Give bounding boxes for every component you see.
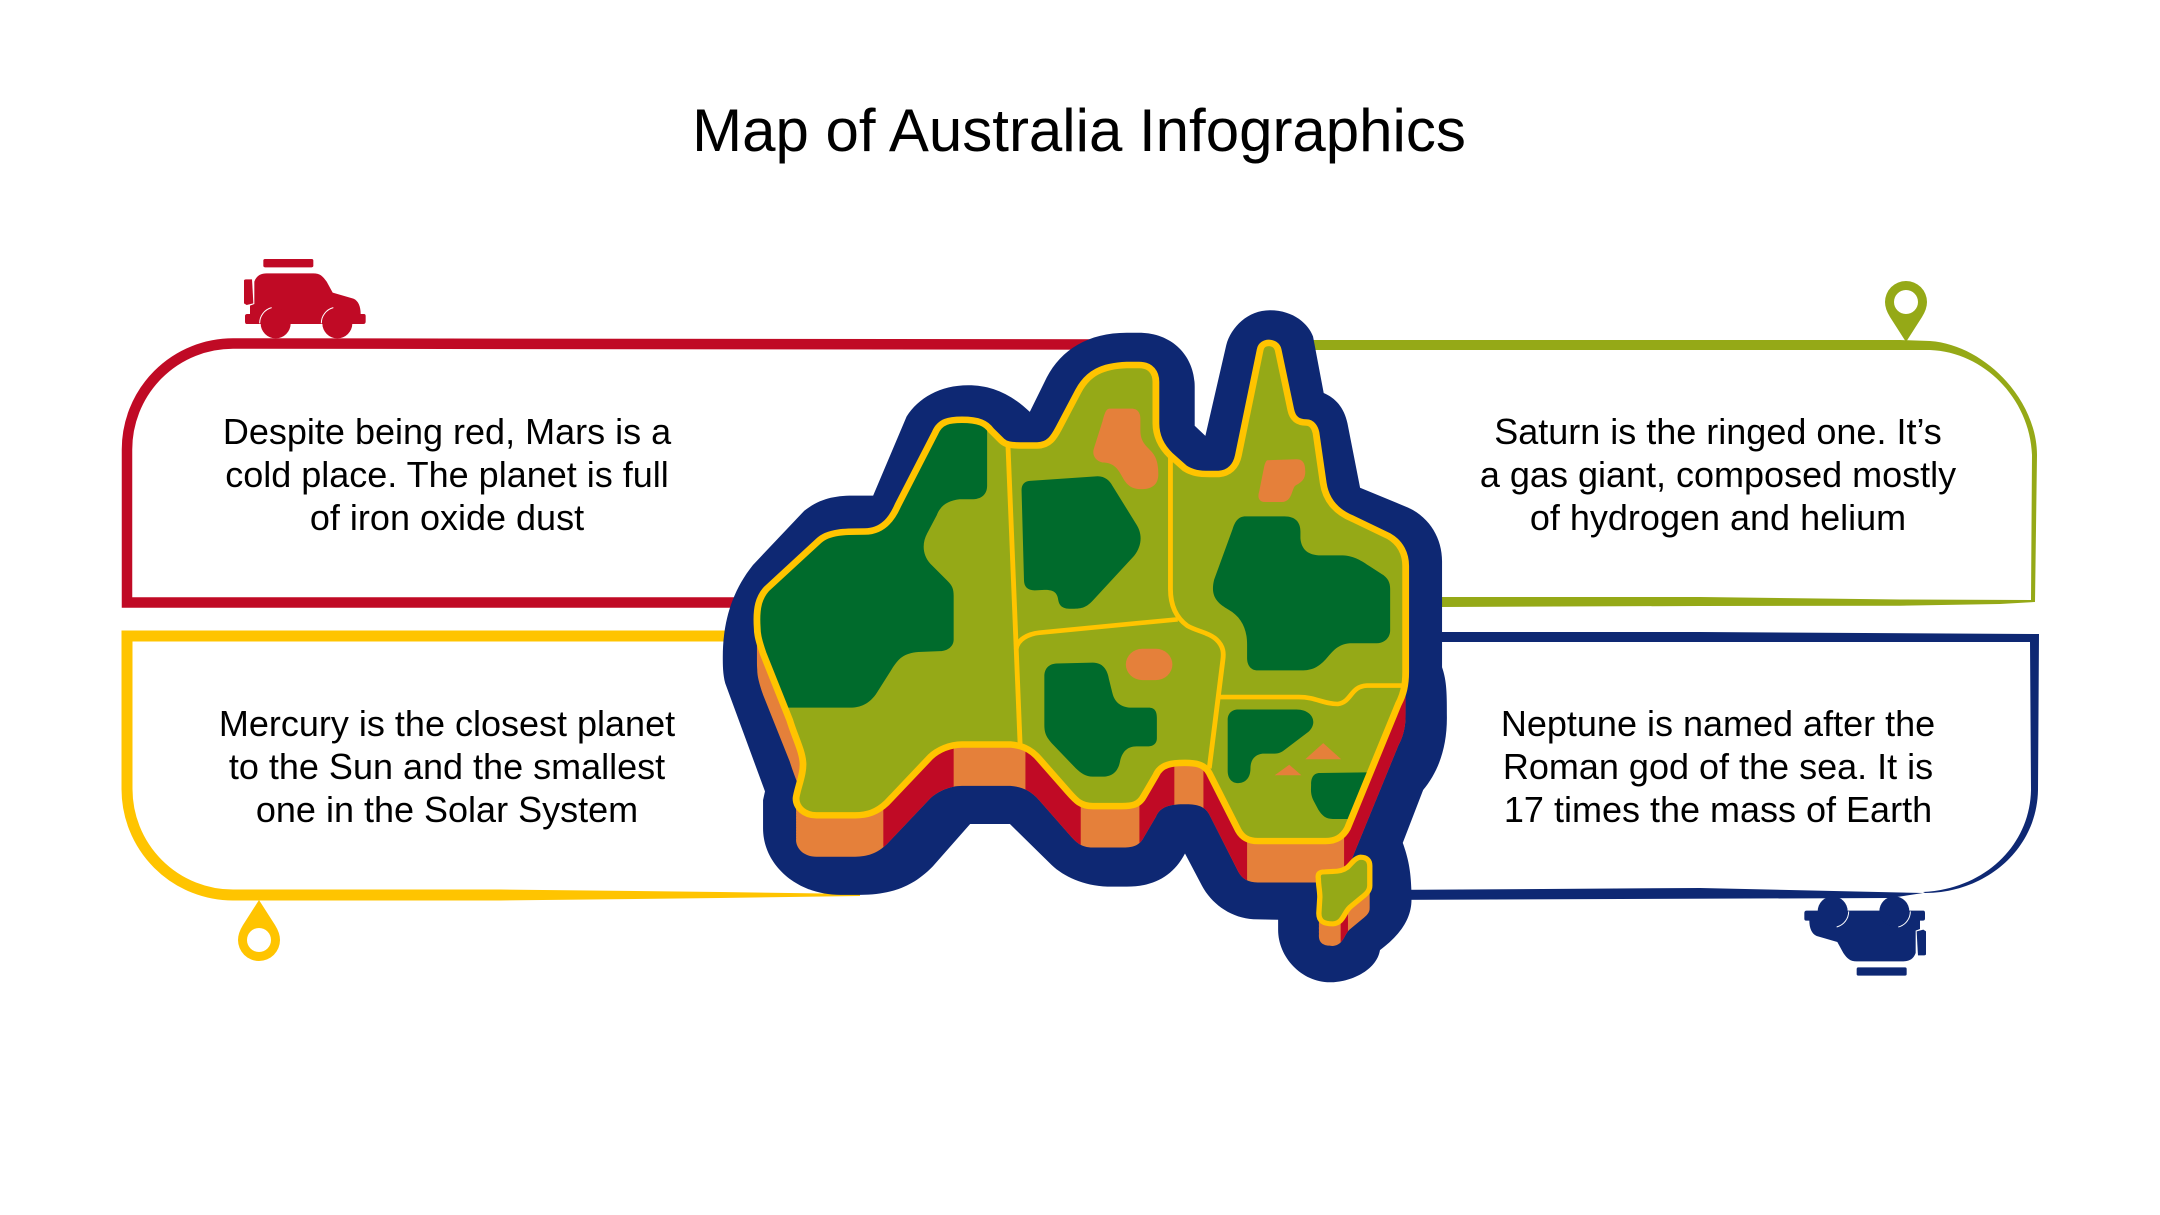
Tasmania [1316, 854, 1372, 946]
text: Saturn: a gas giant, composed mostly [1480, 454, 1956, 495]
panel: Mars (red box) [127, 259, 1110, 602]
panel: Saturn (green box) [1300, 281, 2037, 607]
map of Australia [723, 310, 1447, 982]
text: Saturn: Saturn is the ringed one. It’s [1494, 411, 1942, 452]
text: Neptune [1501, 703, 1935, 830]
text: Neptune: Neptune is named after the [1501, 703, 1935, 744]
text: Mercury: to the Sun and the smallest [229, 746, 665, 787]
text: Mercury: Mercury is the closest planet [219, 703, 675, 744]
title: Map of Australia Infographics [692, 97, 1466, 164]
navy map border [723, 310, 1447, 982]
Tasmania side wall [1318, 893, 1370, 946]
text: Mercury [219, 703, 675, 830]
mainland yellow outline [757, 343, 1406, 841]
text: Saturn: of hydrogen and helium [1530, 497, 1906, 538]
text: Mars: of iron oxide dust [310, 497, 584, 538]
text: Mercury: one in the Solar System [256, 789, 638, 830]
panel: Neptune (navy box) [1380, 632, 2039, 976]
text: Saturn [1480, 411, 1956, 538]
navy box outline [1380, 632, 2039, 900]
text: Neptune: Roman god of the sea. It is [1503, 746, 1933, 787]
green box outline [1300, 340, 2037, 607]
panel: Mercury (yellow box) [127, 636, 860, 961]
text: Mars: Despite being red, Mars is a [223, 411, 672, 452]
dark green regions [760, 423, 1390, 819]
icon: yellow drop pin [238, 900, 280, 961]
yellow box outline [127, 636, 740, 895]
text: Mars [223, 411, 672, 538]
mainland top surface [757, 343, 1406, 841]
Tasmania top surface [1318, 857, 1370, 924]
icon: navy upside-down car [1804, 896, 1926, 976]
text: Mars: cold place. The planet is full [225, 454, 669, 495]
orange regions [1093, 409, 1341, 775]
icon: red car [244, 259, 366, 338]
red box outline [127, 344, 1110, 602]
text: Neptune: 17 times the mass of Earth [1504, 789, 1932, 830]
state borders [1008, 445, 1403, 768]
icon: green map pin [1885, 281, 1927, 342]
map side wall: orange and red bands [756, 644, 1406, 882]
